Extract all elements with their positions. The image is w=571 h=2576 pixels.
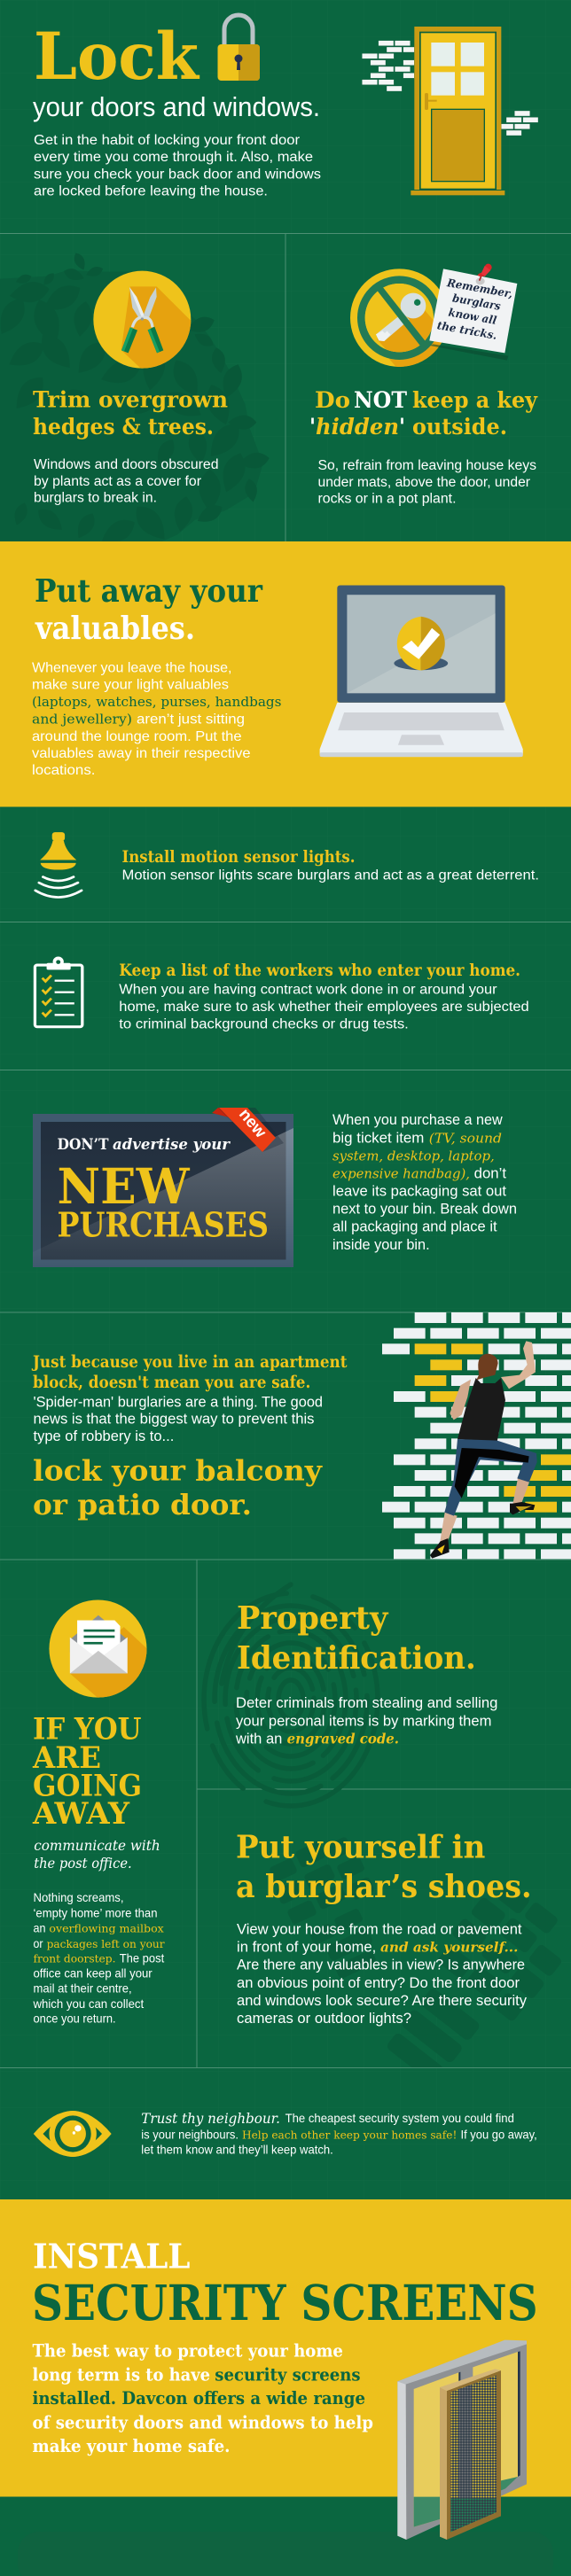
icon: no key with note: [350, 264, 517, 367]
text block: purchases: system, desktop, laptop,: [332, 1148, 495, 1163]
heading: burglar's shoes: [236, 1829, 532, 1905]
heading: do not keep a key: Do: [315, 387, 350, 413]
panel: trim hedges: [0, 251, 270, 549]
text block: apartment: [34, 1395, 323, 1444]
text block: valuables: [32, 661, 282, 778]
heading: workers: Keep a list of the workers who enter your home.: [119, 961, 520, 980]
subheading: communicate: the post office.: [34, 1855, 132, 1872]
text block: screens: installed. Davcon offers a wide range: [32, 2388, 365, 2409]
text block: workers: When you are having contract work done in or around your: [119, 982, 497, 998]
heading: if you are going away: IF YOU: [33, 1712, 142, 1747]
text block: intro: Get in the habit of locking your front door: [34, 133, 300, 148]
heading: put away your valuables: valuables.: [35, 611, 195, 647]
text block: trim: [34, 457, 218, 505]
text block: valuables: (laptops, watches, purses, handbags: [32, 696, 282, 710]
background: leaf silhouettes: [0, 251, 270, 549]
text block: purchases: big ticket item: [332, 1130, 424, 1146]
text block: screens: make your home safe.: [32, 2436, 231, 2456]
heading: trim overgrown: [33, 386, 228, 440]
text block: purchases: (TV, sound: [429, 1130, 502, 1146]
ribbon: new: [212, 1105, 284, 1152]
text block: away: [33, 1890, 165, 2026]
text block: valuables: make sure your light valuables: [32, 677, 229, 693]
text block: workers: [119, 982, 529, 1031]
text block: property: [235, 1695, 497, 1747]
panel: lock your doors and windows: [33, 15, 538, 198]
heading: apartment: [31, 1352, 348, 1392]
subheading: communicate: communicate with: [34, 1837, 160, 1854]
climber figure: [430, 1341, 537, 1559]
text block: apartment: type of robbery is to...: [34, 1428, 174, 1444]
heading: install security screens: [32, 2237, 538, 2331]
heading: do not keep a key: ': [399, 414, 405, 440]
heading: do not keep a key: hidden: [316, 414, 399, 440]
heading: property identification: Identification.: [237, 1640, 476, 1677]
heading: put away your valuables: [35, 573, 263, 647]
ribbon: new: new: [236, 1105, 270, 1141]
text block: screens: The best way to protect your home: [32, 2340, 343, 2361]
text block: purchases: next to your bin. Break down: [332, 1202, 517, 1218]
text block: intro: sure you check your back door and windows: [34, 167, 321, 183]
heading: do not keep a key: outside.: [412, 414, 507, 440]
text block: shoes: in front of your home,: [237, 1940, 376, 1956]
heading: trim overgrown: hedges & trees.: [33, 414, 214, 440]
text block: neighbour: [141, 2110, 537, 2156]
heading: if you are going away: [32, 1712, 142, 1832]
note text: [436, 276, 514, 344]
text block: valuables: and jewellery): [32, 712, 132, 727]
text block: screens: of security doors and windows to help: [32, 2412, 373, 2432]
text block: shoes: and ask yourself...: [380, 1940, 518, 1956]
panel: if you are going away: [32, 1599, 165, 2026]
text block: purchases: don’t: [474, 1165, 506, 1181]
heading: motion: Install motion sensor lights.: [122, 848, 355, 867]
text: motion: Motion sensor lights scare burglars and act as a great deterrent.: [122, 868, 539, 883]
text block: valuables: aren’t just sitting: [137, 712, 245, 727]
note text: know all: [448, 306, 498, 327]
heading: do not keep a key: NOT: [354, 387, 407, 413]
note text: Remember,: [445, 276, 514, 300]
text block: purchases: expensive handbag),: [332, 1165, 470, 1181]
heading: Lock: Lock: [34, 19, 199, 95]
illustration: brick wall and climber: [382, 1312, 571, 1559]
panel: trust thy neighbour: [34, 2110, 537, 2157]
panel: install security screens: [0, 2199, 571, 2576]
heading: apartment: Just because you live in an apartment: [31, 1352, 348, 1372]
heading: apartment: block, doesn't mean you are safe.: [33, 1373, 310, 1392]
sign: don't advertise: [33, 1105, 293, 1267]
text block: key: So, refrain from leaving house keys: [317, 458, 536, 473]
heading: if you are going away: AWAY: [32, 1796, 130, 1832]
illustration: security screen door: [397, 2340, 527, 2540]
text block: valuables: Whenever you leave the house,: [32, 661, 232, 675]
text block: workers: home, make sure to ask whether their employees are subjected: [119, 1000, 529, 1015]
heading: do not keep a key: ': [309, 414, 316, 440]
text block: neighbour: Trust thy neighbour.: [141, 2110, 280, 2127]
callout: lock your balcony: or patio door.: [33, 1488, 252, 1521]
text block: away: packages left on your: [47, 1937, 165, 1950]
icon: light bulb with waves: [35, 832, 82, 898]
note text: the tricks.: [436, 318, 498, 342]
footer band: [0, 2497, 571, 2576]
text block: purchases: leave its packaging sat out: [332, 1183, 506, 1199]
heading: property identification: [237, 1600, 476, 1677]
panel: property identification: [204, 1584, 497, 1806]
text block: intro: [34, 133, 321, 198]
text block: neighbour: If you go away,: [461, 2127, 537, 2141]
heading: if you are going away: GOING: [33, 1769, 142, 1804]
heading: do not keep a key: [309, 387, 538, 440]
panel: hidden key: [309, 264, 538, 507]
text block: trim: Windows and doors obscured: [34, 457, 218, 472]
heading: install security screens: INSTALL: [33, 2237, 190, 2276]
text block: screens: [32, 2340, 373, 2456]
heading: property identification: Property: [237, 1600, 389, 1637]
text block: key: under mats, above the door, under: [317, 475, 530, 490]
text block: away: office can keep all your: [34, 1965, 153, 1980]
text block: away: an: [34, 1921, 46, 1935]
text block: neighbour: is your neighbours.: [141, 2127, 239, 2141]
sign text: PURCHASES: [57, 1205, 269, 1244]
icon: envelope: [49, 1599, 153, 1700]
text block: intro: are locked before leaving the house.: [34, 184, 268, 198]
background: fingerprint: [204, 1584, 378, 1806]
text block: property: your personal items is by marking them: [236, 1714, 491, 1730]
sign text: advertise your: [113, 1136, 231, 1153]
subheading: communicate: [34, 1837, 160, 1872]
callout: lock your balcony: [33, 1453, 323, 1521]
subheading: your doors and windows.: [33, 91, 320, 122]
text block: shoes: Are there any valuables in view? Is anywhere: [237, 1957, 525, 1973]
note text: burglars: [451, 291, 502, 313]
icon: door with bricks: [362, 27, 538, 195]
text block: valuables: around the lounge room. Put the: [32, 729, 242, 744]
text block: key: [317, 458, 536, 507]
icon: padlock: [218, 15, 260, 81]
panel: apartment climber: [31, 1312, 571, 1559]
text block: away: The post: [120, 1951, 164, 1965]
sign text: [57, 1136, 269, 1244]
text block: away: once you return.: [34, 2012, 116, 2026]
text block: property: with an: [235, 1731, 282, 1747]
text block: away: ‘empty home’ more than: [34, 1905, 158, 1919]
background: boot prints: [270, 1838, 560, 2067]
text block: neighbour: The cheapest security system you could find: [286, 2111, 514, 2125]
text block: shoes: cameras or outdoor lights?: [237, 2011, 411, 2027]
text block: key: rocks or in a pot plant.: [317, 491, 456, 507]
text block: away: overflowing mailbox: [49, 1921, 164, 1935]
text block: trim: burglars to break in.: [34, 491, 157, 505]
icon: eye: [34, 2111, 112, 2157]
panel: workers list: [35, 957, 529, 1031]
text block: away: or: [34, 1936, 43, 1950]
text block: screens: security screens: [215, 2364, 361, 2385]
panel: new purchases: [33, 1105, 517, 1267]
sign text: NEW: [57, 1157, 191, 1215]
text block: away: which you can collect: [33, 1996, 144, 2011]
panel: burglar's shoes: [237, 1834, 560, 2067]
heading: burglar's shoes: Put yourself in: [236, 1829, 485, 1865]
heading: put away your valuables: Put away your: [35, 573, 263, 610]
text block: property: Deter criminals from stealing and selling: [236, 1695, 497, 1711]
text block: shoes: [237, 1921, 528, 2027]
text block: away: Nothing screams,: [34, 1890, 124, 1904]
text block: purchases: When you purchase a new: [332, 1112, 503, 1128]
text block: away: mail at their centre,: [34, 1981, 132, 1996]
text block: away: front doorstep.: [34, 1952, 115, 1965]
heading: trim overgrown: Trim overgrown: [33, 386, 228, 413]
icon: clipboard: [35, 957, 82, 1027]
text block: shoes: an obvious point of entry? Do the front door: [237, 1975, 520, 1991]
heading: do not keep a key: keep a key: [412, 387, 538, 413]
sign text: DON’T: [57, 1136, 109, 1153]
text block: apartment: news is that the biggest way to prevent this: [34, 1411, 314, 1427]
text block: intro: every time you come through it. Also, make: [34, 150, 313, 165]
text block: purchases: all packaging and place it: [332, 1219, 497, 1235]
heading: burglar's shoes: a burglar’s shoes.: [236, 1869, 532, 1905]
text block: workers: to criminal background checks or drug tests.: [119, 1016, 409, 1031]
icon: garden shears: [93, 271, 195, 372]
text block: shoes: and windows look secure? Are there security: [237, 1993, 528, 2009]
dividers top: [0, 233, 571, 2068]
text block: apartment: 'Spider-man' burglaries are a thing. The good: [34, 1395, 323, 1411]
panel: motion sensor lights: [35, 832, 539, 898]
text block: valuables: valuables away in their respective: [32, 746, 251, 761]
text block: trim: by plants act as a cover for: [34, 474, 201, 489]
text block: property: engraved code.: [287, 1730, 399, 1747]
text block: purchases: [332, 1112, 517, 1253]
callout: lock your balcony: lock your balcony: [33, 1453, 323, 1487]
text block: valuables: locations.: [32, 763, 96, 778]
panel: put away your valuables: [0, 541, 571, 806]
text block: shoes: View your house from the road or pavement: [237, 1921, 522, 1937]
heading: if you are going away: ARE: [32, 1740, 101, 1776]
text block: screens: long term is to have: [32, 2364, 210, 2385]
text block: neighbour: let them know and they’ll keep watch.: [141, 2142, 333, 2156]
text block: neighbour: Help each other keep your homes safe!: [242, 2128, 457, 2141]
icon: laptop with check: [320, 586, 523, 757]
text block: purchases: inside your bin.: [332, 1237, 430, 1253]
